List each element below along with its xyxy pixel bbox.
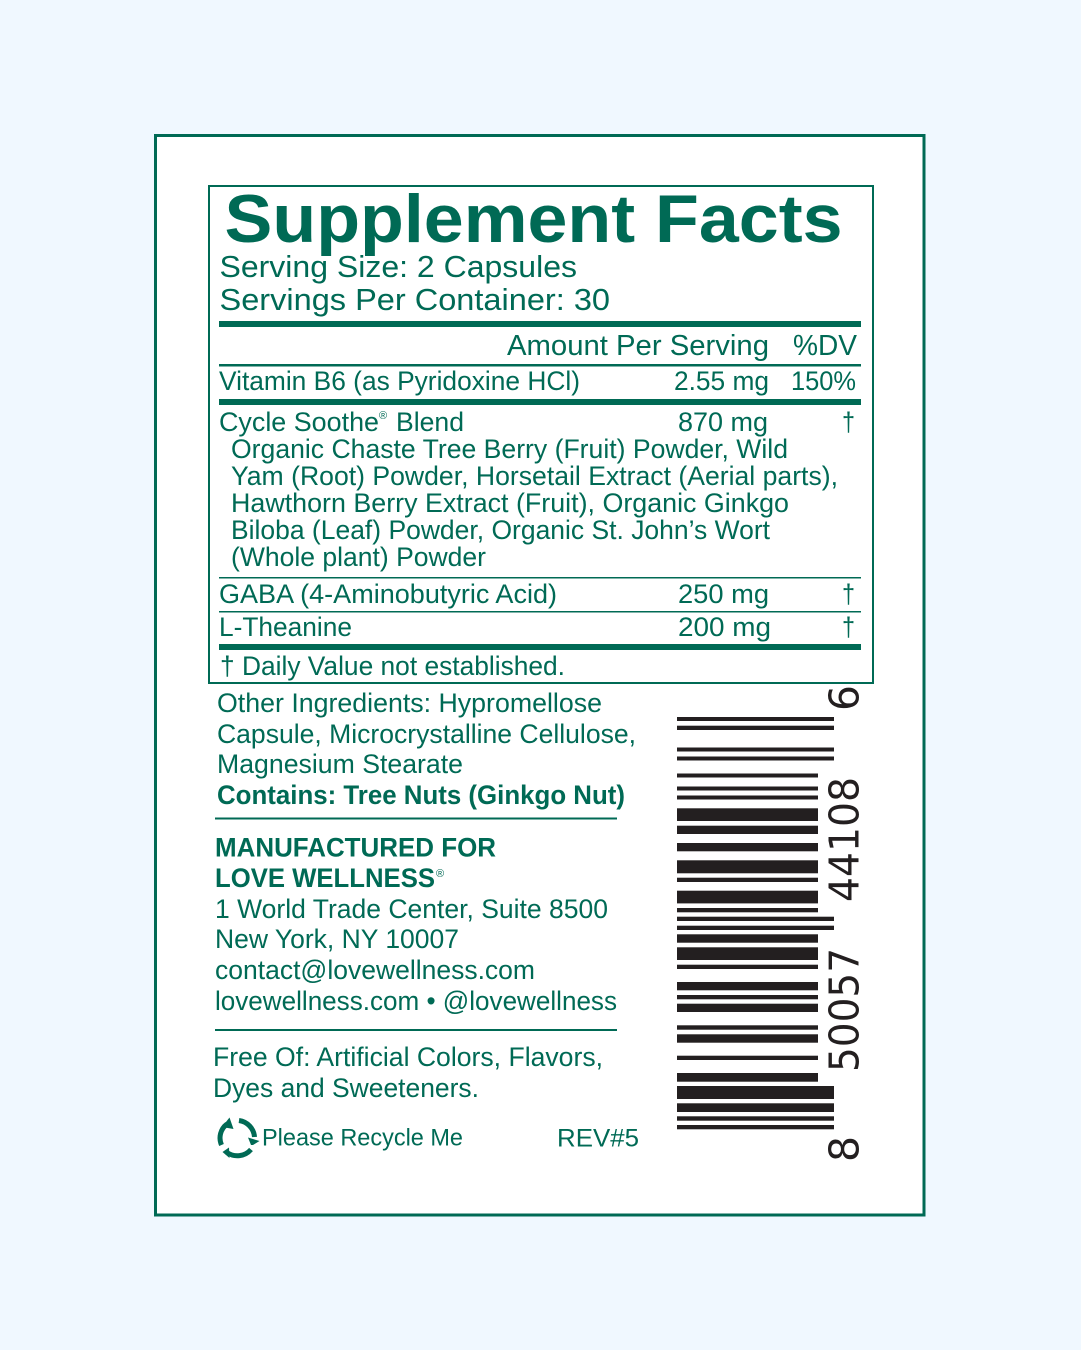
panel: supplement facts (209, 181, 873, 683)
recycle text: Please Recycle Me (262, 1124, 463, 1152)
serving info: Servings Per Container: 30 (220, 282, 610, 317)
barcode digits: 50057 (820, 948, 868, 1072)
row: L-Theanine: † (842, 612, 855, 642)
text block: other ingredients: Magnesium Stearate (217, 749, 463, 779)
revision code: REV#5 (557, 1124, 639, 1152)
barcode digits: 6 (820, 685, 868, 711)
label card (156, 136, 924, 1215)
row: Cycle Soothe Blend: † (842, 407, 855, 437)
serving info (220, 249, 610, 317)
row: GABA (219, 579, 855, 609)
column headers: %DV (793, 330, 858, 362)
row: Cycle Soothe Blend: Cycle Soothe (219, 407, 379, 437)
footnote: † Daily Value not established. (220, 651, 565, 681)
icon: recycle arrows (220, 1118, 260, 1158)
text block: manufacturer: lovewellness.com • @lovewellness (215, 986, 617, 1016)
heading: Supplement Facts: Supplement Facts (224, 181, 842, 257)
row: Vitamin B6: 2.55 mg (674, 366, 769, 396)
text block: manufacturer: 1 World Trade Center, Suite 8500 (215, 894, 608, 924)
blend ingredients: Yam (Root) Powder, Horsetail Extract (Aerial parts), (231, 461, 838, 491)
text block: manufacturer: ® (436, 868, 444, 880)
text block: other ingredients: Other Ingredients: Hypromellose (217, 688, 602, 718)
row: L-Theanine (219, 612, 855, 642)
text block: free of: Dyes and Sweeteners. (213, 1073, 479, 1103)
blend ingredients: Biloba (Leaf) Powder, Organic St. John’s Wort (231, 515, 770, 545)
row: Vitamin B6 (219, 366, 856, 396)
blend ingredients: Hawthorn Berry Extract (Fruit), Organic Ginkgo (231, 488, 789, 518)
text block: manufacturer (215, 832, 617, 1016)
row: L-Theanine: L-Theanine (219, 612, 352, 642)
row: Cycle Soothe Blend: ® (379, 410, 387, 422)
row: Cycle Soothe Blend (219, 407, 855, 572)
row: Cycle Soothe Blend: Blend (396, 407, 464, 437)
text block: manufacturer: contact@lovewellness.com (215, 955, 535, 985)
serving info: Serving Size: 2 Capsules (220, 249, 577, 284)
blend ingredients: Organic Chaste Tree Berry (Fruit) Powder, Wild (231, 434, 788, 464)
row: L-Theanine: 200 mg (678, 612, 771, 642)
row: Vitamin B6: Vitamin B6 (as Pyridoxine HCl) (219, 366, 580, 396)
barcode digits (820, 685, 868, 1162)
text block: free of (213, 1042, 603, 1103)
row: GABA: 250 mg (678, 579, 769, 609)
row: Cycle Soothe Blend: 870 mg (678, 407, 768, 437)
barcode digits: 8 (820, 1136, 868, 1162)
text block: other ingredients: Contains: Tree Nuts (Ginkgo Nut) (217, 780, 625, 810)
text block: manufacturer: New York, NY 10007 (215, 924, 459, 954)
row: GABA: GABA (4-Aminobutyric Acid) (219, 579, 557, 609)
barcode (677, 685, 868, 1162)
row: GABA: † (842, 579, 855, 609)
barcode bars (677, 717, 834, 1129)
text block: other ingredients (217, 688, 636, 810)
blend ingredients: (Whole plant) Powder (231, 542, 486, 572)
column headers: Amount Per Serving (507, 330, 769, 362)
text block: free of: Free Of: Artificial Colors, Flavors, (213, 1042, 603, 1072)
row: Vitamin B6: 150% (791, 366, 856, 396)
barcode digits: 44108 (820, 777, 868, 902)
blend ingredients (231, 434, 838, 572)
text block: other ingredients: Capsule, Microcrystalline Cellulose, (217, 719, 636, 749)
text block: manufacturer: LOVE WELLNESS (215, 863, 435, 893)
text block: manufacturer: MANUFACTURED FOR (215, 832, 496, 862)
